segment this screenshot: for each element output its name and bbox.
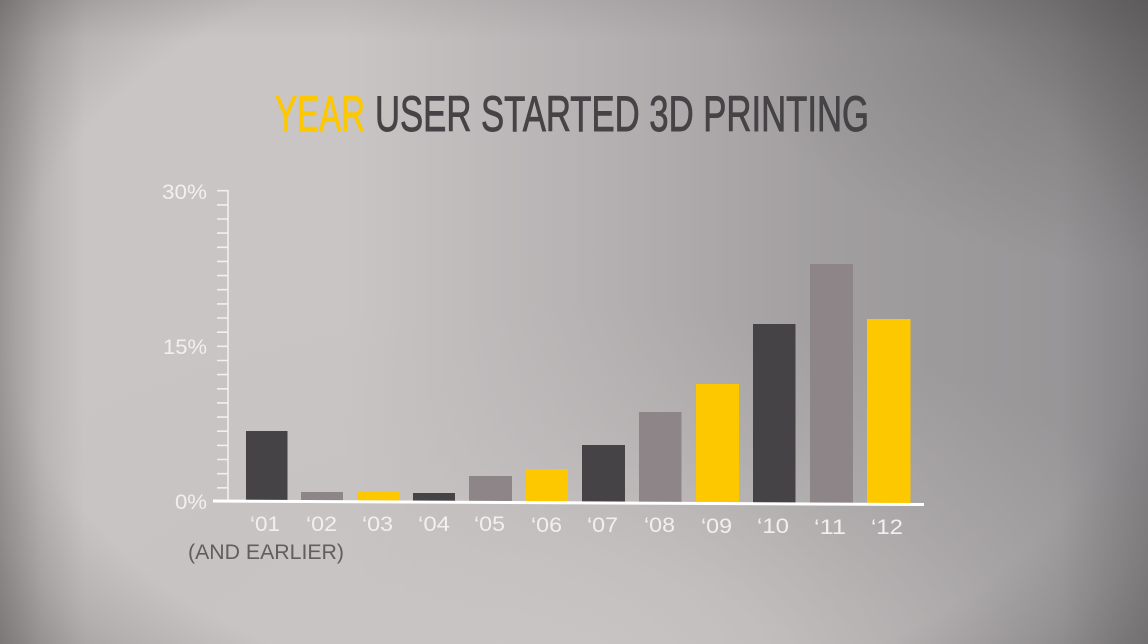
bar chart bbox=[246, 264, 910, 503]
x axis labels: ‘11 bbox=[814, 515, 846, 539]
y axis labels: 0% bbox=[175, 491, 207, 514]
y axis bbox=[217, 190, 228, 501]
x axis labels: ‘05 bbox=[474, 512, 505, 536]
title bbox=[275, 86, 869, 142]
y axis labels: 15% bbox=[163, 336, 207, 359]
x axis labels: ‘08 bbox=[644, 513, 675, 537]
baseline bbox=[213, 500, 924, 506]
x axis labels: ‘12 bbox=[871, 515, 903, 539]
y axis labels: 30% bbox=[162, 181, 207, 204]
x axis note: (AND EARLIER) bbox=[188, 541, 344, 564]
x axis labels: ‘03 bbox=[362, 512, 393, 536]
x axis labels: ‘06 bbox=[531, 513, 562, 537]
x axis labels: ‘07 bbox=[587, 513, 618, 537]
x axis labels bbox=[250, 512, 903, 539]
title: YEAR bbox=[275, 86, 365, 142]
x axis labels: ‘09 bbox=[701, 514, 732, 538]
x axis labels: ‘04 bbox=[418, 512, 450, 536]
x axis labels: ‘10 bbox=[757, 514, 789, 538]
y axis labels bbox=[162, 181, 207, 514]
x axis labels: ‘02 bbox=[306, 512, 337, 536]
x axis labels: ‘01 bbox=[250, 512, 280, 536]
title: USER STARTED 3D PRINTING bbox=[375, 86, 869, 142]
